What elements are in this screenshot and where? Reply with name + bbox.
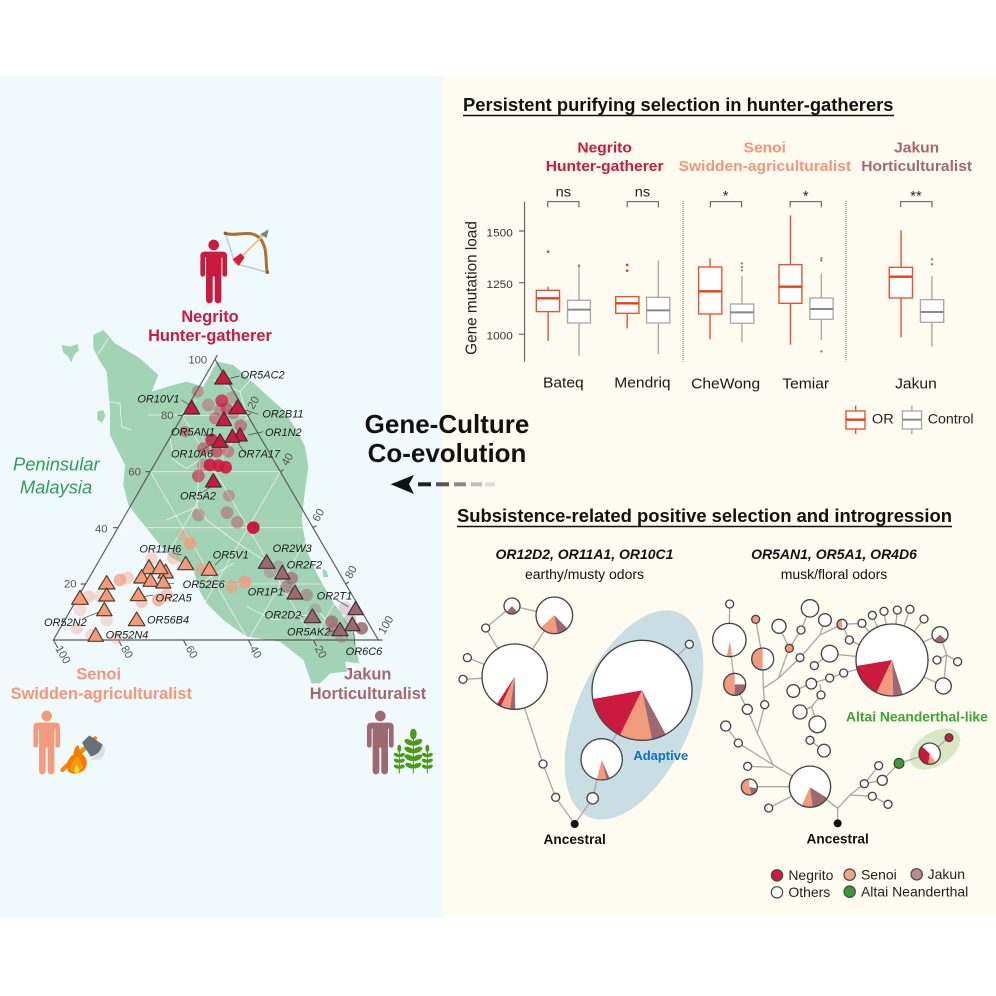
population labels: Temiar	[782, 376, 829, 392]
node: Jakun small	[932, 627, 948, 643]
node: ancestral	[571, 820, 579, 828]
group headers: Horticulturalist	[861, 158, 972, 175]
icon: Jakun person	[367, 711, 394, 774]
gene labels: OR2T1	[317, 590, 352, 602]
axis tick labels: 80	[161, 410, 174, 422]
small nodes	[459, 624, 693, 804]
legend: populations: Senoi	[861, 866, 897, 882]
gene labels: OR11H6	[139, 544, 182, 556]
data points: Negrito genes	[179, 386, 260, 534]
network edges	[463, 606, 689, 824]
subheading: musk/floral odors: OR5AN1, OR5A1, OR4D6	[751, 546, 917, 562]
node: lower hub	[789, 766, 831, 807]
heading: Senoi Swidden-agriculturalist	[11, 666, 192, 703]
heading: Jakun Horticulturalist	[310, 666, 427, 703]
axis tick labels: 20	[64, 579, 77, 591]
box: CheWong	[699, 258, 754, 342]
subheading: earthy/musty odors: earthy/musty odors	[525, 566, 644, 582]
icon: Negrito person	[200, 240, 227, 303]
boxplot chart	[463, 140, 974, 434]
map: Peninsular Malaysia	[62, 330, 359, 683]
group headers	[546, 140, 972, 175]
node: half Senoi small	[837, 619, 847, 629]
gene labels: OR10A6	[171, 449, 214, 461]
icon: axe and fire	[62, 735, 105, 774]
dividers	[683, 201, 846, 362]
label: Adaptive: Adaptive	[633, 748, 688, 763]
y axis: Gene mutation load	[463, 221, 480, 355]
subheading: musk/floral odors	[751, 546, 917, 582]
title: Gene-Culture Co-evolution: Co-evolution	[368, 438, 526, 468]
gene labels	[44, 369, 383, 658]
significance brackets: ns	[635, 185, 650, 201]
legend: populations: Others	[788, 884, 830, 900]
ternary grid	[86, 415, 346, 640]
label: Ancestral: Ancestral	[544, 832, 606, 847]
gene labels: OR2B11	[262, 408, 304, 420]
heading: Senoi Swidden-agriculturalist: Swidden-agriculturalist	[11, 685, 192, 703]
subheading: musk/floral odors: musk/floral odors	[781, 566, 887, 582]
adaptive highlight	[536, 590, 732, 840]
label: Ancestral: Ancestral	[807, 831, 869, 846]
gene labels: OR5AK2	[287, 627, 330, 639]
haplotype network: earthy/musty	[459, 590, 732, 847]
heading: Jakun Horticulturalist: Horticulturalist	[310, 685, 427, 703]
heading: Negrito Hunter-gatherer: Negrito	[181, 308, 239, 326]
subheading: earthy/musty odors: OR12D2, OR11A1, OR10C1	[496, 546, 674, 562]
triangles: Negrito genes	[184, 370, 247, 487]
gene labels: OR7A17	[238, 449, 281, 461]
gene labels: OR2A5	[156, 592, 193, 604]
node: Neanderthal-like haplotype	[919, 743, 940, 764]
axis tick labels	[52, 354, 396, 666]
legend: populations: Jakun	[928, 866, 965, 882]
box: Mendriq	[616, 261, 670, 354]
axis tick labels: 20	[312, 644, 328, 661]
y axis: 1000	[487, 331, 513, 343]
legend: OR and Control	[846, 406, 974, 434]
node: adaptive large	[592, 640, 692, 740]
axis tick labels: 60	[128, 467, 141, 479]
map label	[13, 454, 101, 497]
box: Temiar	[779, 215, 833, 352]
axis tick labels: 40	[247, 644, 263, 661]
y axis: 1500	[487, 228, 513, 239]
gene labels: OR2D2	[265, 609, 301, 621]
node: upper small	[504, 598, 520, 614]
gene labels: OR5A2	[180, 490, 216, 502]
axis tick labels: 60	[183, 644, 199, 661]
panel: right background	[443, 76, 996, 918]
axis tick labels: 100	[188, 354, 207, 366]
plain white nodes	[721, 600, 962, 812]
gene labels: OR1P1	[248, 586, 284, 598]
Senoi nodes	[752, 615, 793, 652]
gene labels: OR5AC2	[241, 369, 285, 381]
legend: populations	[771, 866, 968, 900]
heading: Senoi Swidden-agriculturalist: Senoi	[76, 666, 121, 684]
box: Bateq	[536, 250, 590, 356]
node: ancestral	[834, 819, 842, 827]
icon: crop plants	[393, 729, 433, 773]
heading: Negrito Hunter-gatherer	[148, 308, 273, 345]
node: adaptive medium	[581, 739, 622, 780]
heading: Negrito Hunter-gatherer: Hunter-gatherer	[148, 327, 273, 345]
population labels: Mendriq	[614, 375, 671, 392]
axis tick labels: 100	[52, 644, 72, 666]
haplotype network: musk/floral	[713, 600, 988, 900]
box: Jakun	[889, 230, 944, 347]
axis tick labels: 80	[343, 564, 360, 581]
node: hub left	[482, 644, 547, 709]
y axis: 1250	[487, 279, 513, 291]
gene labels: OR1N2	[265, 427, 302, 439]
population labels	[543, 375, 937, 392]
population labels: CheWong	[691, 376, 760, 392]
legend: populations: Altai Neanderthal	[861, 883, 968, 899]
data points: Jakun genes	[264, 560, 368, 643]
group headers: Senoi	[744, 140, 786, 156]
gene labels: OR2F2	[287, 560, 322, 572]
title: Gene-Culture Co-evolution	[365, 409, 529, 468]
data points: Senoi genes	[70, 529, 251, 645]
significance brackets	[548, 185, 932, 207]
ternary triangle axes	[53, 355, 382, 648]
legend: OR and Control: OR	[872, 412, 894, 427]
node: left large	[713, 623, 746, 657]
node: upper right	[536, 597, 573, 634]
gene labels: OR10V1	[137, 394, 179, 406]
significance brackets: *	[803, 189, 809, 204]
gene labels: OR5V1	[213, 550, 249, 562]
Altai highlight	[902, 720, 968, 778]
subheading: earthy/musty odors	[496, 546, 674, 582]
heading: positive selection: Subsistence-related positive selection and introgression	[457, 505, 952, 526]
population labels: Bateq	[543, 375, 584, 392]
ternary map panel	[13, 330, 396, 683]
population labels: Jakun	[895, 376, 937, 392]
group headers: Jakun	[894, 140, 939, 156]
axis tick labels: 40	[95, 524, 108, 536]
gene labels: OR52N2	[44, 617, 87, 629]
panel: left background	[0, 76, 443, 918]
group headers: Negrito	[577, 140, 632, 156]
gene labels: OR6C6	[346, 646, 383, 658]
arrow: towards map	[391, 475, 495, 494]
label: Altai Neanderthal-like: Altai Neanderthal-like	[846, 709, 988, 725]
icon: Senoi person	[33, 711, 60, 774]
significance brackets: **	[910, 189, 922, 204]
significance brackets: *	[723, 189, 729, 204]
legend: populations: Negrito	[788, 867, 834, 883]
triangles: Jakun genes	[258, 555, 363, 636]
node: main hub	[856, 624, 928, 696]
node: half Senoi	[752, 648, 774, 670]
gene labels: OR52N4	[106, 630, 148, 642]
triangles: Senoi genes	[72, 556, 217, 641]
node: mixed small	[741, 779, 757, 795]
axis tick labels: 60	[311, 507, 327, 524]
node: left mixed	[724, 673, 746, 695]
gene labels: OR2W3	[273, 543, 313, 555]
node: Negrito tip	[945, 734, 953, 742]
heading: Jakun Horticulturalist: Jakun	[344, 666, 391, 684]
gene labels: OR52E6	[183, 579, 226, 591]
icon: bow and arrow	[224, 229, 269, 274]
gene labels: OR5AN1	[171, 427, 215, 439]
significance brackets: ns	[556, 185, 571, 201]
leader lines	[83, 376, 355, 645]
gene labels: OR56B4	[147, 614, 189, 626]
map label: Malaysia	[20, 476, 92, 497]
axis tick labels: 40	[280, 451, 296, 468]
network edges	[726, 604, 958, 823]
heading: purifying selection: Persistent purifying selection in hunter-gatherers	[463, 94, 894, 115]
map label: Peninsular	[13, 454, 101, 475]
axis tick labels: 20	[246, 395, 262, 411]
group headers: Hunter-gatherer	[546, 158, 664, 175]
node: Altai Neanderthal	[894, 758, 904, 768]
axis tick labels: 100	[377, 614, 396, 636]
axis tick labels: 80	[118, 644, 135, 661]
y axis	[463, 202, 525, 362]
legend: OR and Control: Control	[928, 411, 974, 426]
group headers: Swidden-agriculturalist	[679, 158, 851, 175]
title: Gene-Culture Co-evolution: Gene-Culture	[365, 409, 529, 439]
